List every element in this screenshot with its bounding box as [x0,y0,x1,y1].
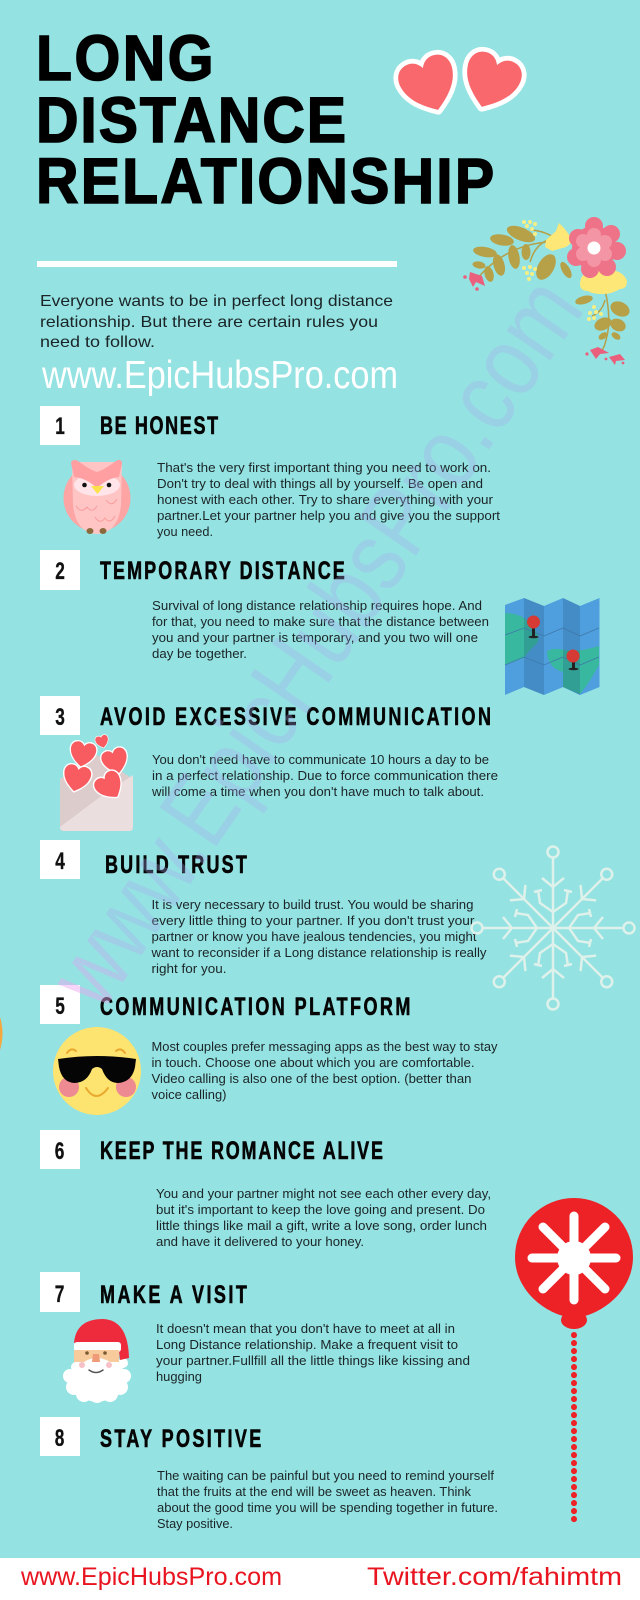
section 3: avoid excessive communication: AVOID EXCESSIVE COMMUNICATION [100,702,491,731]
section 4: build trust: BUILD TRUST [105,850,247,879]
section 2: temporary distance [40,550,489,661]
section 5: communication platform: 5 [55,993,65,1020]
section 8: stay positive: STAY POSITIVE [100,1424,261,1453]
icon: folded map [505,598,600,695]
title [36,23,494,218]
section 4: build trust: want to reconsider if a Long distance relationship is really [150,945,487,960]
footer band: www.EpicHubsPro.com [20,1563,282,1591]
section 2: temporary distance: day be together. [152,646,247,661]
section 8: stay positive: 8 [55,1425,64,1452]
section 5: communication platform: in touch. Choose one about which you are comfortable. [152,1055,474,1070]
section 1: be honest: Don't try to deal with things all by yourself. Be open and [157,476,483,491]
title: RELATIONSHIP [36,146,494,218]
section 7: make a visit: Long Distance relationship. Make a frequent visit to [156,1337,458,1352]
section 8: stay positive: Stay positive. [157,1516,233,1531]
icon: envelope with hearts [60,734,133,831]
footer band [0,1558,640,1600]
section 4: build trust: right for you. [152,961,226,976]
section 5: communication platform: Video calling is also one of the best option. (better than [152,1071,472,1086]
section 8: stay positive: about the good time you will be spending together in future. [157,1500,498,1515]
section 3: avoid excessive communication: 3 [55,704,65,731]
section 5: communication platform: COMMUNICATION PLATFORM [100,992,410,1021]
intro text [40,293,393,351]
section 2: temporary distance: for that, you need to make sure that the distance between [152,614,489,629]
icon: santa [63,1319,131,1403]
section 4: build trust: 4 [55,848,65,875]
section 1: be honest: That's the very first important thing you need to work on. [157,460,491,475]
section 6: keep the romance alive: You and your partner might not see each other every day, [156,1186,491,1201]
section 1: be honest [40,406,500,539]
section 1: be honest: partner.Let your partner help you and give you the support [157,508,500,523]
title: LONG [36,23,214,95]
section 7: make a visit: It doesn't mean that you don't have to meet at all in [156,1321,455,1336]
intro text: relationship. But there are certain rules you [40,314,378,331]
section 4: build trust [40,840,487,976]
title: DISTANCE [36,85,346,157]
section 3: avoid excessive communication: will come a time when you don't have much to talk about. [151,784,484,799]
section 3: avoid excessive communication [40,696,498,799]
section 8: stay positive [40,1417,498,1531]
intro text: Everyone wants to be in perfect long distance [40,293,393,310]
section 8: stay positive: that the fruits at the end will be sweet as heaven. Think [157,1484,471,1499]
section 7: make a visit: hugging [156,1369,202,1384]
section 3: avoid excessive communication: in a perfect relationship. Due to force communication there [152,768,498,783]
icon: red balloon [515,1198,633,1329]
section 5: communication platform: Most couples prefer messaging apps as the best way to stay [152,1039,498,1054]
section 1: be honest: 1 [55,413,65,440]
section 1: be honest: honest with each other. Try to share everything with your [157,492,494,507]
section 2: temporary distance: Survival of long distance relationship requires hope. And [152,598,482,613]
section 5: communication platform: voice calling) [152,1087,226,1102]
section 6: keep the romance alive [40,1130,491,1249]
section 2: temporary distance: you and your partner is temporary, and you two will one [152,630,478,645]
section 5: communication platform [40,985,498,1102]
section 4: build trust: It is very necessary to build trust. You would be sharing [152,897,474,912]
section 6: keep the romance alive: KEEP THE ROMANCE ALIVE [100,1136,383,1165]
section 6: keep the romance alive: 6 [55,1138,64,1165]
section 7: make a visit: your partner.Fullfill all the little things like kissing and [156,1353,470,1368]
website url: www.EpicHubsPro.com [41,354,398,397]
section 2: temporary distance: 2 [55,558,65,585]
section 7: make a visit [40,1272,470,1384]
icon: two hearts [394,48,526,119]
section 1: be honest: BE HONEST [100,411,219,440]
section 2: temporary distance: TEMPORARY DISTANCE [100,556,345,585]
section 6: keep the romance alive: little things like mail a gift, write a love song, order lunch [156,1218,487,1233]
icon: owl [64,460,130,534]
footer band: Twitter.com/fahimtm [367,1563,622,1591]
orange sliver at left edge [0,1017,2,1050]
section 6: keep the romance alive: and have it delivered to your honey. [156,1234,364,1249]
icon: sunglasses smiley [53,1027,141,1115]
section 1: be honest: you need. [157,524,213,539]
intro text: need to follow. [40,334,155,351]
section 7: make a visit: 7 [55,1281,64,1308]
section 3: avoid excessive communication: You don't need have to communicate 10 hours a day to be [152,752,489,767]
icon: flower corner [463,217,632,365]
section 4: build trust: every little thing to your partner. If you don't trust your [152,913,475,928]
section 8: stay positive: The waiting can be painful but you need to remind yourself [157,1468,494,1483]
section 7: make a visit: MAKE A VISIT [100,1280,247,1309]
section 4: build trust: partner or know you have jealous tendencies, you might [152,929,477,944]
icon: snowflake [472,846,634,1010]
section 6: keep the romance alive: but it's important to keep the love going and present. Do [156,1202,485,1217]
dotted balloon string [571,1335,577,1525]
